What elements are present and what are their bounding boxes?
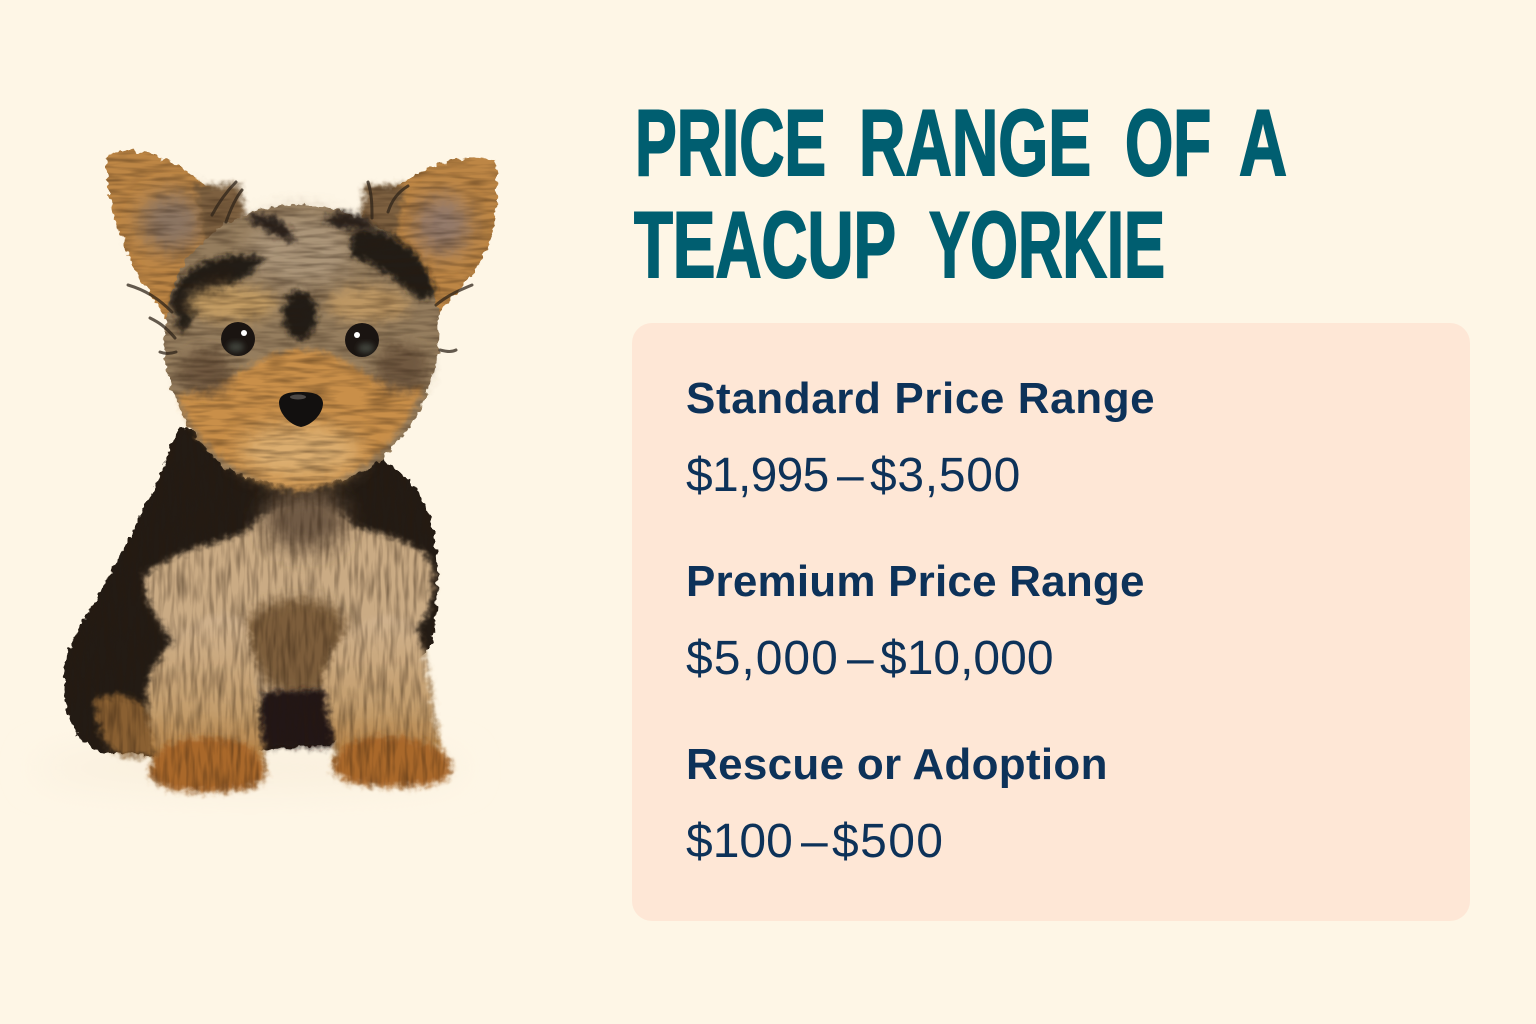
body	[64, 425, 452, 792]
left brow	[188, 286, 276, 322]
title line 1: RANGE	[859, 90, 1091, 195]
left ear tuft	[195, 185, 248, 250]
title line 1: OF	[1125, 90, 1211, 195]
title line 1: A	[1239, 90, 1287, 195]
right paw	[333, 737, 452, 787]
face base	[164, 205, 439, 485]
heading: rescue or adoption: Rescue or Adoption	[686, 740, 1108, 789]
right ear	[362, 158, 497, 318]
price: standard: $3,500	[870, 449, 1021, 502]
shadow	[35, 748, 465, 788]
title line 2	[634, 192, 1165, 297]
title line 1: PRICE	[635, 90, 826, 195]
body: neck shade	[263, 490, 347, 550]
title	[634, 90, 1287, 297]
left paw	[150, 738, 266, 792]
title line 2: YORKIE	[929, 192, 1165, 297]
muzzle light	[240, 424, 360, 480]
price: premium: $10,000	[880, 632, 1054, 685]
left eye	[221, 322, 255, 356]
price: premium: –	[847, 632, 874, 685]
muzzle	[178, 349, 424, 490]
puppy illustration	[62, 148, 498, 800]
right eye	[345, 323, 379, 357]
body: belly	[243, 598, 345, 695]
body: chest	[145, 507, 433, 700]
body: dark coat	[64, 425, 437, 757]
right ear inner	[414, 195, 470, 255]
left dark patch	[170, 255, 265, 335]
centre spot	[283, 290, 317, 340]
left ear	[107, 150, 245, 318]
left leg	[147, 615, 265, 775]
fur wisps	[128, 182, 472, 354]
price: standard	[686, 449, 1021, 502]
price: rescue: –	[801, 815, 828, 868]
left ear inner	[140, 192, 204, 252]
nose	[279, 392, 323, 427]
price: standard: $1,995	[686, 449, 829, 502]
price: premium: $5,000	[686, 632, 839, 685]
top dark streaks	[245, 212, 378, 244]
right ear tuft	[358, 185, 405, 245]
right dark patch	[350, 229, 436, 302]
price: rescue: $100	[686, 815, 793, 868]
price: rescue	[686, 815, 944, 868]
panel: prices	[632, 323, 1470, 921]
cheek left	[179, 350, 231, 394]
price: standard: –	[837, 449, 864, 502]
title line 2: TEACUP	[634, 192, 896, 297]
body: haunch	[95, 695, 160, 757]
body: gap between legs	[262, 688, 335, 747]
forehead	[248, 214, 352, 286]
right leg	[324, 616, 445, 770]
heading: standard price range: Standard Price Range	[686, 374, 1155, 423]
right brow	[326, 286, 410, 322]
cheek right	[376, 344, 428, 392]
heading: premium price range: Premium Price Range	[686, 557, 1145, 606]
price: premium	[686, 632, 1054, 685]
title line 1	[635, 90, 1287, 195]
price: rescue: $500	[832, 815, 944, 868]
head	[107, 150, 497, 490]
